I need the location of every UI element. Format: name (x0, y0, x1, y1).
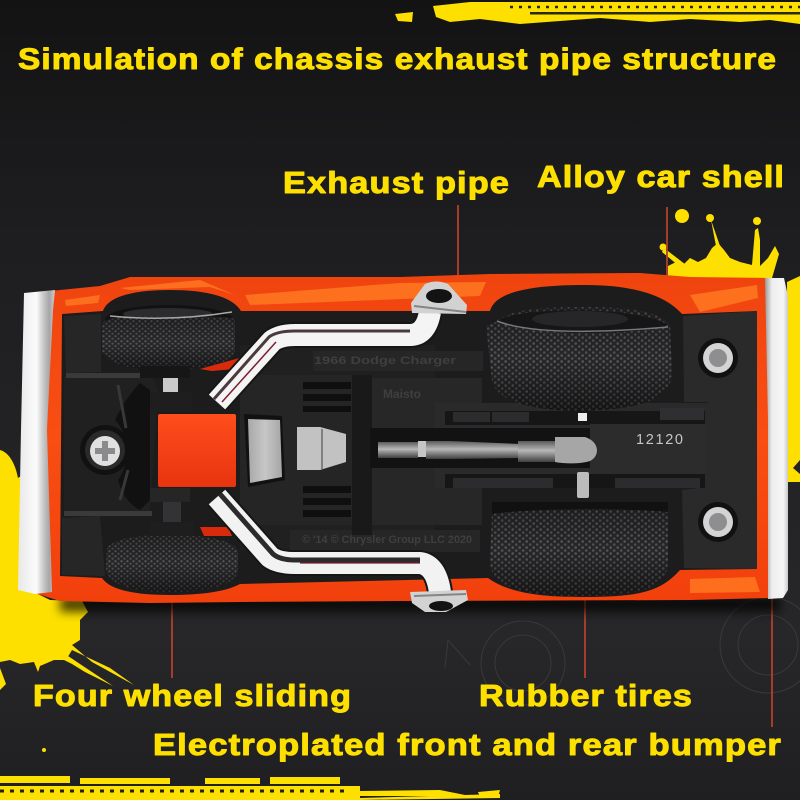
shell highlights (65, 280, 760, 593)
label: electroplated bumper: Electroplated front and rear bumper (153, 727, 782, 762)
yellow paint splash: top right (660, 209, 779, 278)
tire: rear upper (486, 307, 672, 411)
embossed chassis text: 1966 Dodge Charger (314, 355, 457, 367)
yellow tire track: bottom (0, 776, 500, 800)
embossed chassis text (302, 355, 472, 546)
label: alloy car shell: Alloy car shell (537, 159, 785, 194)
red accents behind front wheels (200, 357, 243, 536)
yellow tire track: top (395, 2, 800, 24)
red engine block (158, 414, 236, 487)
tire: front lower (106, 522, 238, 592)
exhaust pipe lower (217, 494, 440, 592)
yellow paint splash: right edge (787, 276, 800, 482)
leader lines (172, 205, 772, 727)
orange car shell (35, 273, 770, 603)
tire: front upper (102, 305, 235, 378)
right chrome bumper (765, 278, 788, 599)
silver engine parts (244, 413, 597, 498)
front suspension and mount (64, 373, 192, 528)
title: Simulation of chassis exhaust pipe structure (18, 43, 777, 76)
faint background graphics (445, 597, 800, 705)
embossed chassis text: Maisto (383, 387, 421, 401)
tire: rear lower (490, 502, 668, 596)
car shadow (60, 596, 780, 612)
centre chassis plate (240, 345, 708, 552)
chassis code 12120: 12120 (636, 432, 683, 448)
car chassis (18, 273, 788, 612)
left chrome bumper (18, 290, 55, 594)
dark wheel wells and floor (60, 285, 757, 597)
label: four wheel sliding: Four wheel sliding (33, 678, 352, 713)
embossed chassis text: © '14 © Chrysler Group LLC 2020 (302, 534, 472, 546)
label: rubber tires: Rubber tires (479, 678, 693, 713)
chassis vents (303, 382, 351, 517)
yellow paint splash: left side (0, 450, 134, 752)
label: exhaust pipe: Exhaust pipe (283, 165, 510, 200)
front screw (90, 436, 120, 466)
rear screws (698, 338, 738, 542)
chrome exhaust pipes (214, 312, 440, 592)
exhaust tip lower (410, 590, 468, 612)
exhaust pipe upper (214, 312, 430, 402)
exhaust tip upper (411, 282, 467, 314)
